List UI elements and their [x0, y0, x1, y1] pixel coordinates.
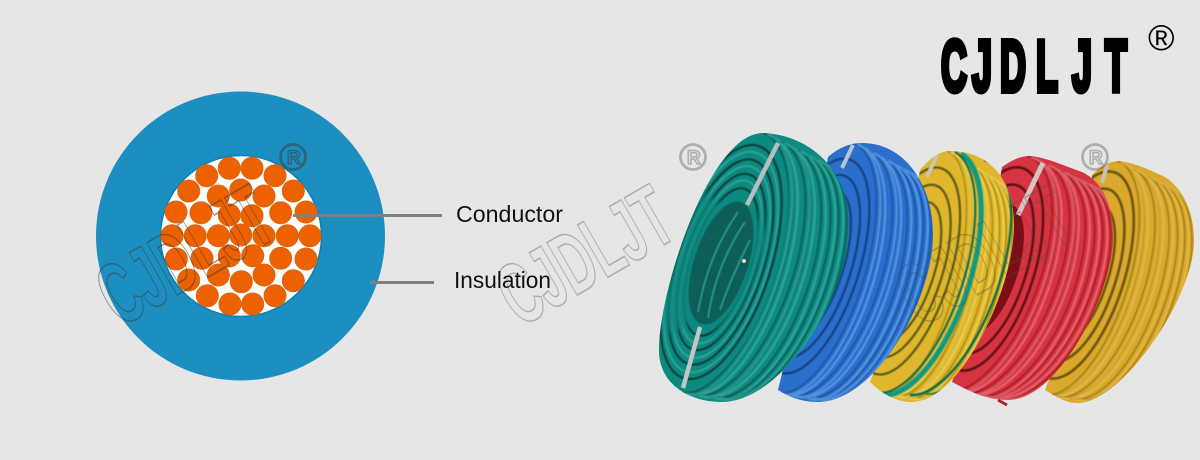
- coil centre hole: [688, 201, 754, 325]
- strap bottom: [683, 327, 700, 388]
- strap: [927, 155, 937, 177]
- right face shading: [710, 210, 770, 345]
- watermark right: [880, 144, 1108, 344]
- strap: [842, 145, 853, 168]
- watermark left: R: [287, 148, 301, 169]
- coil: gold wire: [1045, 161, 1194, 403]
- watermark left: [80, 144, 306, 344]
- watermark centre: [480, 144, 706, 344]
- brand logo: T: [1105, 26, 1127, 107]
- wire tail: [998, 400, 1007, 405]
- brand logo: L: [1036, 26, 1058, 107]
- coil: yellow-green wire: [870, 151, 1014, 402]
- coil face rings: [659, 134, 788, 384]
- brand logo: J: [972, 26, 992, 107]
- insulation layer: [96, 92, 385, 380]
- leader line: insulation: [370, 281, 434, 284]
- label: conductor: Conductor: [456, 201, 563, 227]
- coil: green wire: [659, 133, 849, 402]
- wire end: [742, 259, 746, 263]
- face left shading: [662, 190, 725, 335]
- strap: [1102, 165, 1107, 183]
- brand logo: J: [1072, 26, 1092, 107]
- watermark centre: CJDLJT: [480, 166, 690, 344]
- watermark centre: R: [687, 148, 701, 169]
- registered mark: ®: [1148, 17, 1175, 58]
- cable cross-section diagram: [96, 92, 385, 380]
- watermark right: R: [1089, 148, 1103, 169]
- coil: blue wire: [778, 143, 933, 402]
- brand logo: D: [1000, 26, 1026, 107]
- conductor strands: [161, 157, 321, 315]
- leader line: conductor: [293, 214, 442, 217]
- label: insulation: Insulation: [454, 267, 551, 293]
- watermark left: CJDLJT: [80, 166, 290, 344]
- conductor core: [160, 156, 322, 316]
- green stripes: [884, 154, 981, 395]
- strap: [1018, 163, 1043, 215]
- brand logo: [941, 17, 1175, 107]
- brand logo: C: [941, 26, 967, 107]
- coil: red wire: [952, 156, 1113, 400]
- strap top: [747, 143, 778, 205]
